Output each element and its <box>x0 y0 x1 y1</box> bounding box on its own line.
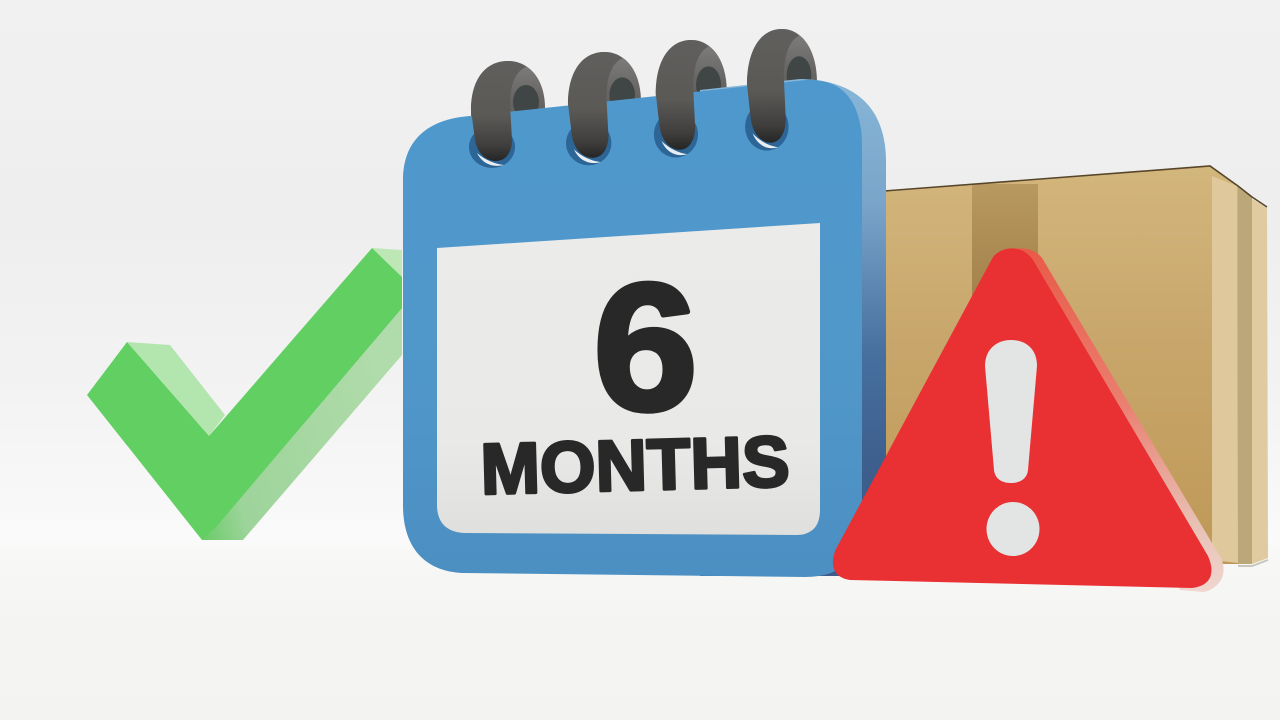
calendar label: MONTHS <box>480 422 791 510</box>
icon: green check mark <box>87 248 402 540</box>
binder ring backs <box>471 29 817 130</box>
calendar body front <box>403 80 862 577</box>
calendar page <box>437 223 820 535</box>
calendar number: 6 <box>593 247 698 449</box>
exclamation mark <box>985 340 1040 556</box>
calendar body side <box>700 79 886 576</box>
packing tape <box>972 184 1038 314</box>
icon: red warning triangle <box>833 248 1224 592</box>
icon: cardboard box <box>880 166 1268 566</box>
triangle side edge <box>1012 248 1224 592</box>
calendar <box>403 29 886 577</box>
binder ring fronts <box>469 29 799 168</box>
triangle front <box>833 248 1211 588</box>
